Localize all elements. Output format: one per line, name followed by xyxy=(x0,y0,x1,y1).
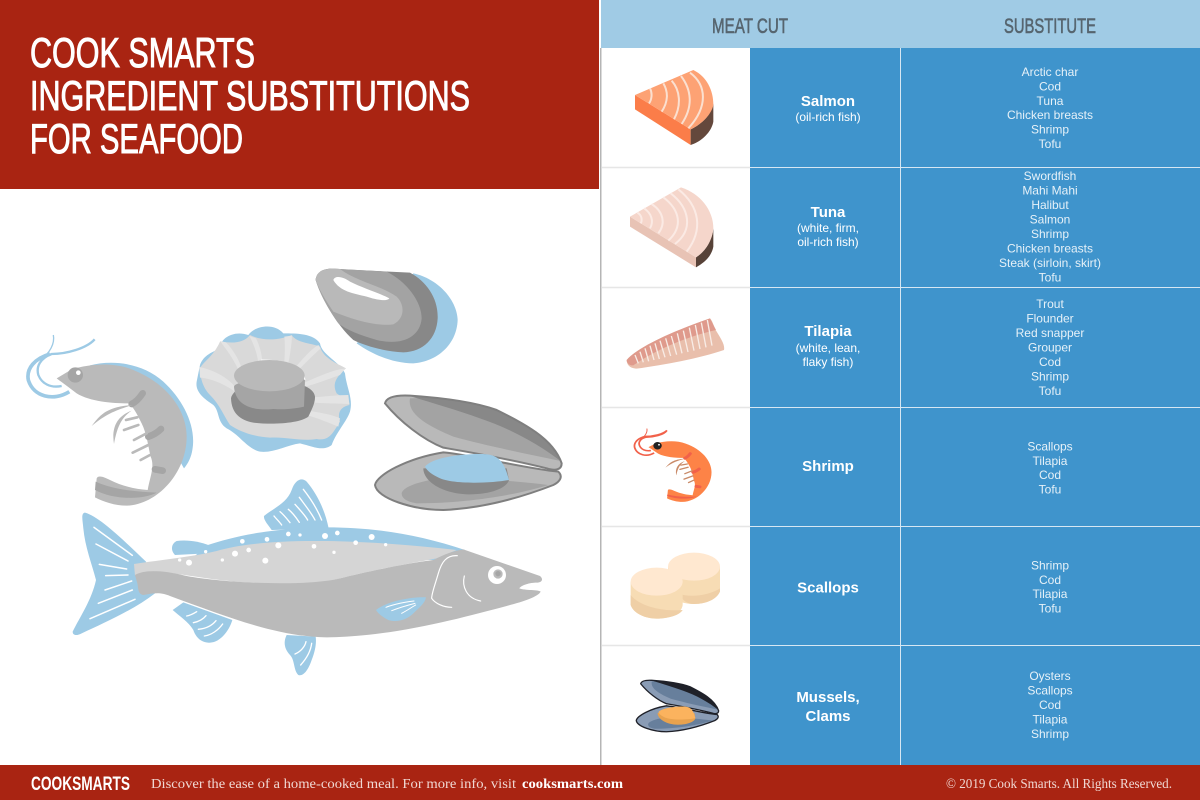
row: scallops: Cod xyxy=(1039,573,1061,587)
row: salmon: Arctic char xyxy=(1022,65,1078,79)
row: salmon: Cod xyxy=(1039,80,1061,94)
icon: scallops xyxy=(631,553,720,619)
title panel: INGREDIENT SUBSTITUTIONS xyxy=(30,72,470,119)
row: shrimp: Cod xyxy=(1039,468,1061,482)
row: tilapia: Grouper xyxy=(1028,340,1072,354)
row: tuna: Shrimp xyxy=(1031,227,1069,241)
row: tuna: Mahi Mahi xyxy=(1022,184,1078,198)
icon: tuna cut xyxy=(630,187,713,267)
row: tilapia: Shrimp xyxy=(1031,370,1069,384)
row: tilapia: Tofu xyxy=(1039,384,1061,398)
row: shrimp: Tilapia xyxy=(1033,454,1068,468)
row: tuna xyxy=(797,169,1101,284)
table body background xyxy=(600,0,1200,765)
icon: salmon cut xyxy=(635,70,713,145)
illustration: grey open mussel xyxy=(375,396,562,510)
table header: MEAT CUT xyxy=(712,15,788,38)
row: tuna: Halibut xyxy=(1031,198,1069,212)
row: tilapia: Flounder xyxy=(1026,312,1074,326)
row: mussels and clams: Scallops xyxy=(1027,684,1073,698)
row: tilapia: (white, lean, xyxy=(796,341,860,355)
row: tilapia: Red snapper xyxy=(1016,326,1084,340)
row: tilapia: Tilapia xyxy=(804,323,852,340)
row: scallops: Tofu xyxy=(1039,602,1061,616)
row: tuna: Tofu xyxy=(1039,270,1061,284)
row: salmon: Shrimp xyxy=(1031,122,1069,136)
row: salmon xyxy=(795,65,1093,151)
title panel: COOK SMARTS xyxy=(30,29,255,76)
icon: orange shrimp xyxy=(634,429,712,502)
row: salmon: Chicken breasts xyxy=(1007,108,1093,122)
table header xyxy=(601,0,1200,48)
row: shrimp xyxy=(802,440,1073,496)
row: salmon: Tuna xyxy=(1037,94,1064,108)
row: tuna: Chicken breasts xyxy=(1007,242,1093,256)
row: mussels and clams: Mussels, xyxy=(796,689,860,706)
row: mussels and clams xyxy=(796,669,1073,741)
footer: cooksmarts.com xyxy=(522,777,623,792)
row: tuna: oil-rich fish) xyxy=(797,235,859,249)
row: salmon: (oil-rich fish) xyxy=(795,110,861,124)
row: tilapia: Trout xyxy=(1036,297,1064,311)
row: tuna: (white, firm, xyxy=(797,221,859,235)
row: tuna: Swordfish xyxy=(1024,169,1076,183)
row: salmon: Tofu xyxy=(1039,137,1061,151)
row: scallops: Tilapia xyxy=(1033,587,1068,601)
row: mussels and clams: Clams xyxy=(805,708,851,725)
row: scallops: Shrimp xyxy=(1031,558,1069,572)
icon: mussel xyxy=(636,680,719,732)
row: tuna: Tuna xyxy=(811,204,846,221)
row: mussels and clams: Cod xyxy=(1039,698,1061,712)
row: shrimp: Scallops xyxy=(1027,440,1073,454)
row: tilapia: flaky fish) xyxy=(803,355,853,369)
row: mussels and clams: Tilapia xyxy=(1033,712,1068,726)
illustration: grey scallop in shell xyxy=(196,326,351,452)
footer: © 2019 Cook Smarts. All Rights Reserved. xyxy=(946,777,1172,792)
row: tuna: Steak (sirloin, skirt) xyxy=(999,256,1101,270)
footer: COOKSMARTS xyxy=(31,774,130,795)
row: mussels and clams: Oysters xyxy=(1029,669,1071,683)
footer: Discover the ease of a home-cooked meal. For more info, visit xyxy=(151,777,516,792)
row: tilapia: Cod xyxy=(1039,355,1061,369)
table header: SUBSTITUTE xyxy=(1004,15,1096,38)
row: scallops: Scallops xyxy=(797,580,859,596)
illustration: grey closed mussel xyxy=(316,269,458,363)
row: tuna: Salmon xyxy=(1030,212,1070,226)
row: salmon: Salmon xyxy=(801,93,855,110)
title panel: FOR SEAFOOD xyxy=(30,115,243,162)
icon: tilapia fillet xyxy=(627,318,724,369)
row: scallops xyxy=(797,558,1069,616)
row: shrimp: Tofu xyxy=(1039,482,1061,496)
title panel xyxy=(0,0,599,189)
illustration: grey shrimp xyxy=(28,335,193,506)
row: tilapia xyxy=(796,297,1084,398)
row: shrimp: Shrimp xyxy=(802,458,854,475)
footer xyxy=(0,765,1200,800)
illustration: grey fish xyxy=(73,479,542,675)
row: mussels and clams: Shrimp xyxy=(1031,727,1069,741)
